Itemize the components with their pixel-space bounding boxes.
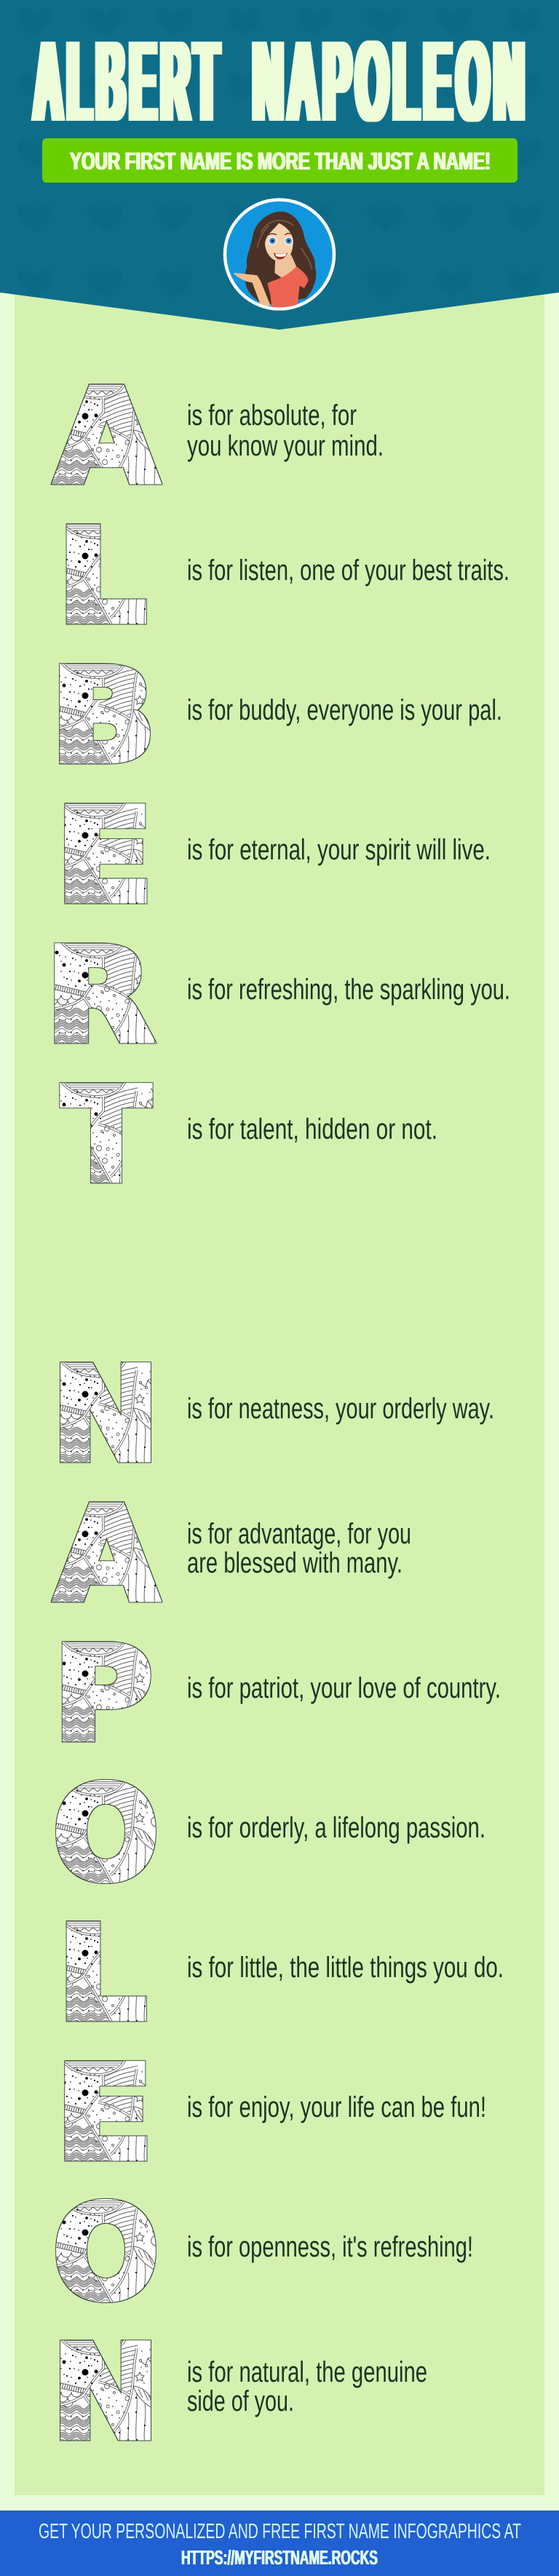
- row: E is for eternal: [55, 782, 491, 931]
- decorated letter N: N: [52, 2318, 159, 2468]
- decorated letter A: A: [55, 1480, 158, 1629]
- title: ALBERT NAPOLEON: [34, 17, 529, 146]
- footer bar: [0, 2511, 559, 2576]
- row: B is for buddy: [51, 643, 502, 791]
- caption N: side of you.: [187, 2385, 294, 2417]
- title: ALBERT NAPOLEON: ALBERT: [34, 17, 223, 146]
- row: O is for openness: [53, 2179, 473, 2328]
- decorated letter O: O: [53, 2179, 159, 2328]
- header banner with chevron base: [0, 0, 559, 330]
- decorated letter B: B: [51, 643, 156, 791]
- subtitle bar: [42, 138, 518, 183]
- row: O is for orderly: [53, 1760, 485, 1909]
- decorated letter N: N: [52, 1340, 159, 1490]
- decorated letter E: E: [55, 2040, 154, 2188]
- caption A: is for advantage, for you: [187, 1518, 411, 1550]
- avatar: cartoon woman in circle: [225, 199, 334, 309]
- caption A: you know your mind.: [187, 430, 384, 462]
- decorated letter O: O: [53, 1760, 159, 1909]
- caption A: is for absolute, for: [187, 399, 357, 432]
- row: L is for listen: [58, 502, 510, 651]
- decorated letter R: R: [46, 921, 153, 1070]
- row: T is for talent: [63, 1061, 437, 1210]
- row: R is for refreshing: [46, 921, 510, 1070]
- row: P is for patriot: [53, 1620, 501, 1769]
- decorated letter L: L: [58, 502, 146, 651]
- row: E is for enjoy: [55, 2040, 486, 2188]
- caption T: is for talent, hidden or not.: [187, 1113, 437, 1145]
- footer line 2: URL: HTTPS://MYFIRSTNAME.ROCKS: [181, 2546, 378, 2569]
- title: ALBERT NAPOLEON: NAPOLEON: [253, 18, 529, 146]
- row: N is for natural: [52, 2318, 427, 2468]
- decorated letter P: P: [53, 1620, 153, 1769]
- row: A is for absolute: [55, 362, 384, 512]
- row: A is for advantage: [55, 1480, 411, 1629]
- decorated letter A: A: [55, 362, 158, 512]
- decorated letter L: L: [58, 1899, 146, 2048]
- caption A: are blessed with many.: [187, 1547, 403, 1579]
- decorated letter T: T: [63, 1061, 150, 1210]
- row: L is for little: [58, 1899, 504, 2048]
- decorated letter E: E: [55, 782, 154, 931]
- row: N is for neatness: [52, 1340, 494, 1490]
- caption N: is for natural, the genuine: [187, 2356, 427, 2388]
